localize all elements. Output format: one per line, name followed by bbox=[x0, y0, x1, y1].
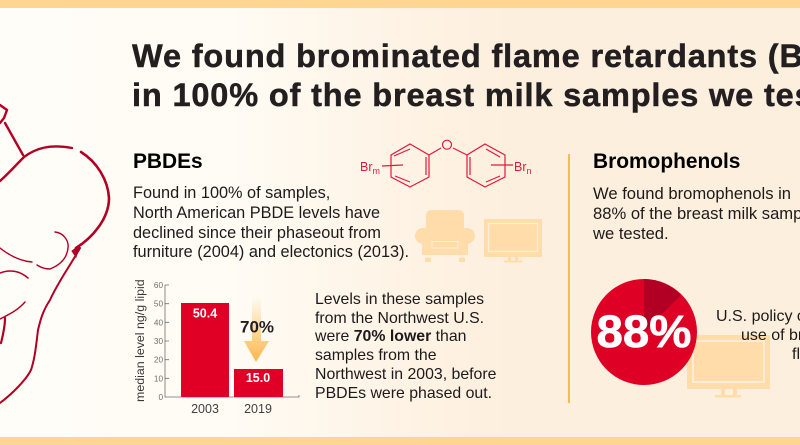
y axis numbers bbox=[154, 281, 163, 402]
axis label: median level ng/g lipid bbox=[133, 279, 147, 402]
text: PBDE summary: North American PBDE levels have bbox=[133, 204, 380, 222]
text: PBDE summary bbox=[133, 184, 409, 261]
top band bbox=[0, 0, 800, 8]
text: PBDE summary: furniture (2004) and electonics (2013). bbox=[133, 243, 409, 261]
text: levels comparison: from the Northwest U.S. bbox=[315, 310, 484, 327]
arrow: decrease bbox=[244, 297, 269, 362]
year labels: 2019 bbox=[244, 402, 272, 416]
text: bromophenols summary: we tested. bbox=[593, 224, 669, 243]
y axis numbers: 30 bbox=[154, 337, 163, 346]
text: bromophenols summary: We found bromophenols in bbox=[593, 184, 791, 203]
icon: chemical structure of PBDE bbox=[360, 140, 532, 188]
illustration: mother and baby line art bbox=[0, 104, 110, 404]
y axis numbers: 20 bbox=[154, 356, 163, 365]
heading: PBDEs: PBDEs bbox=[133, 150, 203, 173]
title bbox=[132, 38, 800, 113]
text: PBDE summary: Found in 100% of samples, bbox=[133, 184, 330, 202]
text: PBDE summary: declined since their phaseout from bbox=[133, 224, 381, 242]
bar: 2019 bbox=[234, 369, 283, 397]
panel: Bromophenols bbox=[593, 150, 800, 243]
icon: armchair bbox=[415, 210, 475, 262]
text: U.S. policy bbox=[716, 308, 800, 363]
icon: television behind pie bbox=[687, 335, 770, 398]
y axis numbers: 40 bbox=[154, 318, 163, 327]
icon: television bbox=[484, 219, 542, 262]
bar: 2019: 15.0 bbox=[246, 371, 270, 385]
y axis numbers: 50 bbox=[154, 300, 163, 309]
y axis numbers: 10 bbox=[154, 374, 163, 383]
panel: PBDEs bbox=[133, 150, 496, 402]
text: levels comparison: PBDEs were phased out. bbox=[315, 385, 492, 402]
bottom band bbox=[0, 437, 800, 445]
y axis and ticks bbox=[165, 285, 299, 397]
text: levels comparison: were 70% lower than bbox=[315, 328, 466, 345]
icon: chemical structure of PBDE: n bbox=[526, 166, 532, 176]
icon: chemical structure of PBDE: m bbox=[372, 166, 380, 176]
year labels bbox=[191, 402, 272, 416]
text: levels comparison: Levels in these samples bbox=[315, 291, 484, 308]
y axis numbers: 0 bbox=[158, 393, 163, 402]
text: bromophenols summary bbox=[593, 184, 800, 243]
icon: chemical structure of PBDE: Br bbox=[514, 160, 526, 174]
divider bbox=[568, 154, 570, 403]
year labels: 2003 bbox=[191, 402, 219, 416]
text: levels comparison: samples from the bbox=[315, 347, 437, 364]
text: levels comparison: Northwest in 2003, before bbox=[315, 366, 496, 383]
heading: Bromophenols: Bromophenols bbox=[593, 150, 740, 173]
y axis numbers: 60 bbox=[154, 281, 163, 290]
bar chart: median PBDE level bbox=[133, 279, 300, 416]
arrow label: 70%: 70% bbox=[240, 318, 274, 337]
text: levels comparison bbox=[315, 291, 496, 402]
pie chart: 88% bbox=[591, 279, 697, 385]
pie chart: 88%: 88% bbox=[596, 306, 692, 357]
bar: 2003 bbox=[181, 303, 229, 397]
bar: 2003: 50.4 bbox=[193, 306, 217, 320]
icon: chemical structure of PBDE: Br bbox=[360, 160, 372, 174]
